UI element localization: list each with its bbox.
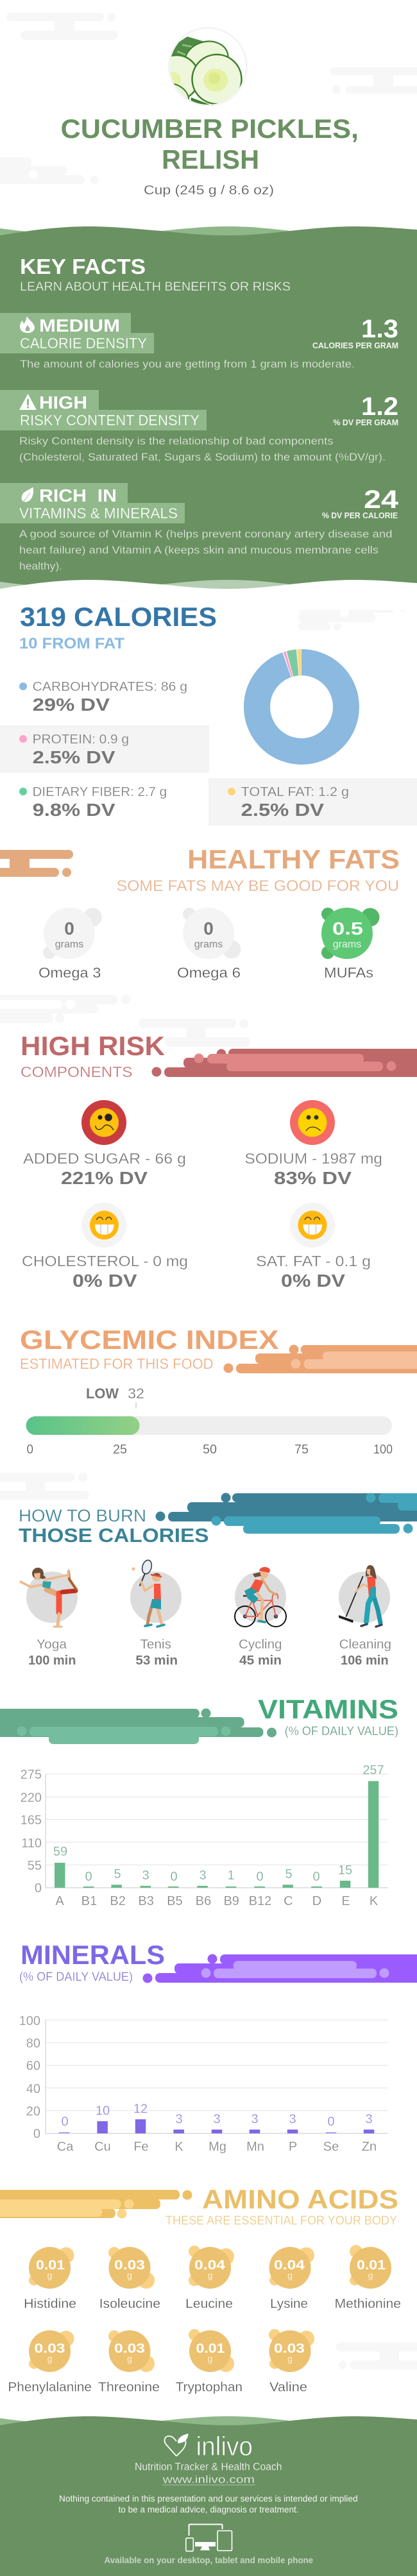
- heading: vitamins: (% OF DAILY VALUE): [285, 1725, 398, 1738]
- amino: isoleucine: [99, 2247, 160, 2311]
- gauge: glycemic index: [26, 1385, 393, 1457]
- fact: calorie density: CALORIE DENSITY: [20, 335, 147, 352]
- amino: lysine: [269, 2247, 314, 2311]
- bar chart: minerals: K: [174, 2140, 183, 2154]
- fat: mufas: 0.5: [332, 919, 363, 938]
- amino: threonine: Threonine: [98, 2380, 160, 2394]
- fat: omega 3: grams: [55, 939, 83, 950]
- fact: rich in vitamins and minerals: VITAMINS & MINERALS: [19, 505, 178, 521]
- fat: omega 6: 0: [203, 919, 214, 938]
- heading: how to burn those calories: [19, 1506, 209, 1546]
- heading: amino acids: [166, 2184, 398, 2228]
- heading: how to burn those calories: HOW TO BURN: [19, 1506, 146, 1525]
- heading: glycemic index: ESTIMATED FOR THIS FOOD: [20, 1355, 213, 1372]
- heading: high risk: [21, 1031, 165, 1080]
- amino: histidine: Histidine: [24, 2297, 76, 2311]
- bar chart: minerals: 3: [365, 2112, 373, 2126]
- heading: healthy fats: HEALTHY FATS: [187, 844, 400, 874]
- bar chart: minerals: Ca: [57, 2140, 74, 2154]
- bar chart: vitamins: [21, 1763, 388, 1908]
- bar chart: vitamins: E: [341, 1894, 350, 1908]
- risk: added sugar: [23, 1100, 186, 1188]
- macro: dietary fiber: 9.8% DV: [33, 800, 115, 820]
- heading: amino acids: THESE ARE ESSENTIAL FOR YOUR BODY: [166, 2214, 397, 2228]
- panel: footer: [0, 2416, 417, 2576]
- bar chart: vitamins: D: [312, 1894, 321, 1908]
- amino: tryptophan: [176, 2329, 243, 2394]
- icon: grinning face: [81, 1203, 126, 1248]
- brand name: inlivo: [196, 2431, 253, 2461]
- fact: risky content density: [0, 390, 398, 463]
- fat: mufas: MUFAs: [324, 965, 373, 981]
- activity: yoga: 100 min: [28, 1654, 76, 1668]
- bar chart: vitamins: B1: [81, 1894, 97, 1908]
- macro: dietary fiber: [19, 785, 167, 820]
- heading: high risk: COMPONENTS: [21, 1063, 133, 1080]
- bar chart: vitamins: B9: [223, 1894, 239, 1908]
- icon: grinning face: [290, 1203, 335, 1248]
- fact: risky content density: 1.2: [361, 393, 398, 421]
- amino: phenylalanine: [8, 2330, 92, 2394]
- bar chart: minerals: 3: [289, 2112, 296, 2126]
- bar chart: minerals: P: [289, 2140, 297, 2154]
- ribbon: amino acids: [0, 2190, 192, 2218]
- disclaimer: to be a medical advice, diagnosis or treatment.: [118, 2504, 299, 2514]
- macro: total fat: 2.5% DV: [241, 800, 324, 820]
- bar chart: vitamins: 1: [227, 1868, 235, 1883]
- heading: high risk: HIGH RISK: [21, 1031, 165, 1061]
- heading: vitamins: VITAMINS: [258, 1694, 398, 1724]
- bar chart: vitamins: B6: [196, 1894, 211, 1908]
- icon: flame: [20, 316, 35, 333]
- bar chart: vitamins: B2: [110, 1894, 126, 1908]
- activity: tennis: Tenis: [140, 1638, 171, 1652]
- bar chart: vitamins: 15: [338, 1863, 352, 1877]
- bar chart: vitamins: 110: [21, 1836, 42, 1851]
- activity: tennis: [130, 1559, 182, 1668]
- bar chart: vitamins: 55: [28, 1859, 42, 1873]
- activity: cycling: Cycling: [239, 1638, 282, 1652]
- icon: cleaning figure: [339, 1565, 382, 1627]
- heading: calories: 10 FROM FAT: [19, 635, 124, 652]
- bar chart: vitamins: 220: [21, 1791, 42, 1805]
- gauge: glycemic index: 0: [27, 1443, 33, 1457]
- bar chart: vitamins: 5: [114, 1867, 121, 1881]
- gauge: glycemic index: 50: [203, 1443, 217, 1457]
- fact: calorie density: 1.3: [361, 315, 398, 343]
- fat: mufas: grams: [333, 939, 361, 950]
- amino: leucine: [185, 2246, 234, 2311]
- bar chart: vitamins: K: [370, 1894, 379, 1908]
- amino: tryptophan: Tryptophan: [176, 2380, 243, 2394]
- bar chart: vitamins: C: [284, 1894, 293, 1908]
- amino: valine: g: [287, 2353, 293, 2364]
- amino: lysine: 0.04: [274, 2258, 305, 2273]
- panel: key facts: [0, 226, 417, 610]
- gauge: glycemic index: 25: [113, 1443, 127, 1457]
- icon: devices: [186, 2525, 232, 2551]
- gauge: glycemic index: 75: [294, 1443, 309, 1457]
- heading: minerals: [19, 1940, 165, 1984]
- fat: omega 6: [177, 908, 241, 981]
- amino: leucine: 0.04: [194, 2258, 225, 2273]
- amino: histidine: g: [47, 2270, 52, 2280]
- risk: added sugar: ADDED SUGAR - 66 g: [23, 1150, 186, 1167]
- fat: omega 6: grams: [194, 939, 223, 950]
- food photo: cucumber slices: [168, 27, 248, 106]
- amino: lysine: g: [287, 2270, 293, 2280]
- bar chart: vitamins: 165: [21, 1813, 42, 1827]
- ribbon: glycemic: [223, 1344, 417, 1373]
- ribbon: high risk: [151, 1049, 417, 1077]
- risk: saturated fat: 0% DV: [281, 1271, 345, 1291]
- website: www.inlivo.com: [162, 2473, 255, 2486]
- heading: vitamins: [258, 1694, 398, 1738]
- heading: minerals: (% OF DAILY VALUE): [19, 1970, 133, 1984]
- fat: omega 3: 0: [64, 919, 74, 938]
- bar chart: vitamins: 0: [256, 1870, 264, 1884]
- bar chart: minerals: 0: [327, 2115, 335, 2129]
- bar chart: minerals: Mg: [208, 2140, 226, 2154]
- gauge: glycemic index: LOW: [86, 1385, 119, 1402]
- title: CUCUMBER PICKLES,: [60, 114, 359, 144]
- fact: calorie density: MEDIUM: [39, 316, 120, 335]
- amino: threonine: [98, 2330, 160, 2394]
- amino: leucine: g: [208, 2270, 212, 2280]
- icon: leaf: [21, 487, 33, 502]
- amino: phenylalanine: Phenylalanine: [8, 2380, 92, 2394]
- bar chart: minerals: 0: [61, 2115, 69, 2129]
- fact: risky content density: RISKY CONTENT DENSITY: [20, 412, 200, 428]
- activity: cleaning: 106 min: [341, 1654, 389, 1668]
- amino: tryptophan: 0.01: [196, 2341, 225, 2356]
- heading: calories: [19, 602, 217, 652]
- amino: methionine: Methionine: [335, 2297, 401, 2311]
- fact: risky content density: HIGH: [39, 393, 87, 412]
- fat: omega 6: Omega 6: [177, 965, 241, 981]
- icon: sad face: [290, 1100, 335, 1145]
- ribbon: minerals: [142, 1954, 417, 1983]
- bar chart: minerals: 20: [26, 2105, 40, 2119]
- tagline: Nutrition Tracker & Health Coach: [135, 2461, 282, 2473]
- bar chart: vitamins: B5: [167, 1894, 183, 1908]
- icon: inlivo heart logo: [165, 2434, 189, 2456]
- bar chart: minerals: 0: [33, 2127, 40, 2141]
- heading: glycemic index: [20, 1325, 278, 1372]
- macro: carbohydrates: [19, 680, 187, 715]
- bar chart: minerals: 10: [96, 2104, 110, 2118]
- bar chart: minerals: 3: [213, 2112, 221, 2126]
- activity: cycling: 45 min: [239, 1654, 282, 1668]
- disclaimer: [59, 2493, 358, 2514]
- bar chart: minerals: 12: [133, 2102, 148, 2116]
- bar chart: minerals: Zn: [362, 2140, 377, 2154]
- risk: sodium: SODIUM - 1987 mg: [244, 1150, 382, 1167]
- bar chart: minerals: [19, 2014, 388, 2154]
- risk: cholesterol: CHOLESTEROL - 0 mg: [22, 1253, 188, 1269]
- macro: carbohydrates: CARBOHYDRATES: 86 g: [33, 680, 187, 694]
- risk: saturated fat: SAT. FAT - 0.1 g: [256, 1253, 371, 1269]
- fact: rich in vitamins and minerals: % DV PER CALORIE: [322, 511, 398, 520]
- bar chart: minerals: Se: [323, 2140, 339, 2154]
- heading: healthy fats: [117, 844, 400, 895]
- fact: risky content density: Risky Content density is the relationship of bad components: [19, 435, 334, 447]
- fat: mufas: [321, 908, 380, 981]
- heading: healthy fats: SOME FATS MAY BE GOOD FOR YOU: [117, 877, 399, 895]
- fact: rich in vitamins and minerals: healthy).: [19, 560, 62, 572]
- bar chart: vitamins: B3: [138, 1894, 154, 1908]
- heading: minerals: MINERALS: [21, 1940, 165, 1970]
- bar chart: minerals: 100: [19, 2014, 40, 2028]
- bar chart: minerals: Mn: [246, 2140, 264, 2154]
- title: [60, 114, 359, 174]
- amino: histidine: 0.01: [36, 2258, 65, 2273]
- amino: histidine: [24, 2247, 76, 2311]
- fact: rich in vitamins and minerals: RICH IN: [39, 486, 117, 505]
- fact: risky content density: (Cholesterol, Saturated Fat, Sugars & Sodium) to the amount (%DV/gr).: [19, 451, 386, 463]
- serving size: Cup (245 g / 8.6 oz): [144, 183, 274, 198]
- fat: omega 3: [38, 908, 102, 981]
- heading: amino acids: AMINO ACIDS: [202, 2184, 398, 2214]
- macro: protein: 2.5% DV: [33, 747, 115, 767]
- bar chart: vitamins: 257: [362, 1763, 384, 1777]
- risk: cholesterol: [22, 1203, 188, 1291]
- macro: dietary fiber: DIETARY FIBER: 2.7 g: [33, 785, 167, 799]
- risk: cholesterol: 0% DV: [72, 1271, 137, 1291]
- fact: rich in vitamins and minerals: [0, 483, 399, 572]
- risk: saturated fat: [256, 1203, 371, 1291]
- bar chart: minerals: 3: [251, 2112, 259, 2126]
- amino: threonine: 0.03: [114, 2341, 145, 2356]
- activity: cycling: [235, 1567, 286, 1668]
- bar chart: vitamins: 0: [35, 1881, 42, 1895]
- icon: queasy face: [81, 1100, 126, 1145]
- fact: rich in vitamins and minerals: 24: [364, 486, 399, 514]
- activity: cleaning: Cleaning: [339, 1638, 391, 1652]
- amino: methionine: 0.01: [357, 2258, 386, 2273]
- risk: sodium: 83% DV: [274, 1168, 352, 1188]
- icon: warning triangle: [19, 394, 37, 410]
- heading: key facts: KEY FACTS: [20, 255, 146, 278]
- bar chart: vitamins: 5: [285, 1867, 293, 1881]
- amino: phenylalanine: g: [47, 2353, 52, 2364]
- bar chart: vitamins: 0: [85, 1870, 92, 1884]
- amino: valine: 0.03: [274, 2341, 305, 2356]
- macro: total fat: TOTAL FAT: 1.2 g: [241, 785, 349, 799]
- availability note: Available on your desktop, tablet and mobile phone: [104, 2555, 313, 2565]
- donut chart: macronutrients: [257, 662, 346, 752]
- fact: risky content density: % DV PER GRAM: [334, 418, 398, 427]
- icon: tennis figure: [132, 1559, 164, 1627]
- amino: valine: Valine: [269, 2380, 307, 2394]
- amino: leucine: Leucine: [185, 2297, 233, 2311]
- activity: tennis: 53 min: [135, 1654, 178, 1668]
- bar chart: vitamins: A: [55, 1894, 64, 1908]
- amino: isoleucine: g: [127, 2270, 132, 2280]
- amino: threonine: g: [127, 2353, 132, 2364]
- bar chart: minerals: 80: [26, 2037, 40, 2051]
- bar chart: vitamins: 59: [53, 1845, 67, 1859]
- amino: valine: [269, 2329, 314, 2394]
- amino: isoleucine: Isoleucine: [99, 2297, 160, 2311]
- heading: calories: 319 CALORIES: [20, 602, 217, 632]
- ribbon: healthy fats: [0, 850, 73, 877]
- amino: methionine: g: [368, 2270, 373, 2280]
- bar chart: vitamins: 275: [21, 1768, 42, 1782]
- activity: yoga: [21, 1568, 78, 1668]
- bar chart: vitamins: 0: [170, 1870, 178, 1884]
- icon: cycling figure: [235, 1567, 286, 1627]
- risk: added sugar: 221% DV: [61, 1168, 148, 1188]
- bar chart: vitamins: 3: [142, 1868, 149, 1883]
- fact: calorie density: CALORIES PER GRAM: [312, 341, 398, 350]
- amino: lysine: Lysine: [270, 2297, 308, 2311]
- fact: calorie density: [0, 313, 398, 370]
- ribbon: burn calories: [155, 1493, 417, 1534]
- amino: tryptophan: g: [208, 2353, 212, 2364]
- icon: yoga figure: [21, 1568, 76, 1627]
- bar chart: minerals: 60: [26, 2059, 40, 2073]
- fact: rich in vitamins and minerals: A good source of Vitamin K (helps prevent coronary artery disease and: [19, 528, 393, 540]
- amino: methionine: [335, 2245, 401, 2311]
- macro: protein: [0, 725, 209, 773]
- bar chart: vitamins: 3: [199, 1868, 207, 1883]
- disclaimer: Nothing contained in this presentation and our services is intended or implied: [59, 2493, 358, 2504]
- fact: rich in vitamins and minerals: heart failure) and Vitamin A (keeps skin and mucous membrane cells: [19, 544, 379, 556]
- macro: total fat: [208, 778, 417, 826]
- bar chart: minerals: Cu: [94, 2140, 111, 2154]
- amino: phenylalanine: 0.03: [35, 2341, 65, 2356]
- activity: yoga: Yoga: [37, 1638, 67, 1652]
- amino: isoleucine: 0.03: [114, 2258, 145, 2273]
- gauge: glycemic index: 32: [128, 1385, 144, 1402]
- gauge: glycemic index: 100: [373, 1443, 393, 1457]
- fact: calorie density: The amount of calories you are getting from 1 gram is moderate.: [20, 358, 355, 370]
- macro: protein: PROTEIN: 0.9 g: [33, 733, 129, 747]
- risk: sodium: [244, 1100, 382, 1188]
- macro: carbohydrates: 29% DV: [33, 695, 110, 715]
- bar chart: minerals: 3: [175, 2112, 183, 2126]
- title: RELISH: [162, 144, 259, 174]
- bar chart: vitamins: B12: [249, 1894, 271, 1908]
- bar chart: minerals: 40: [26, 2082, 40, 2096]
- heading: how to burn those calories: THOSE CALORIES: [19, 1524, 209, 1546]
- ribbon: vitamins: [0, 1709, 277, 1744]
- heading: glycemic index: GLYCEMIC INDEX: [20, 1325, 278, 1355]
- subheading: LEARN ABOUT HEALTH BENEFITS OR RISKS: [20, 280, 291, 294]
- activity: cleaning: [339, 1565, 391, 1668]
- fat: omega 3: Omega 3: [38, 965, 101, 981]
- bar chart: minerals: Fe: [133, 2140, 149, 2154]
- bar chart: vitamins: 0: [312, 1870, 320, 1884]
